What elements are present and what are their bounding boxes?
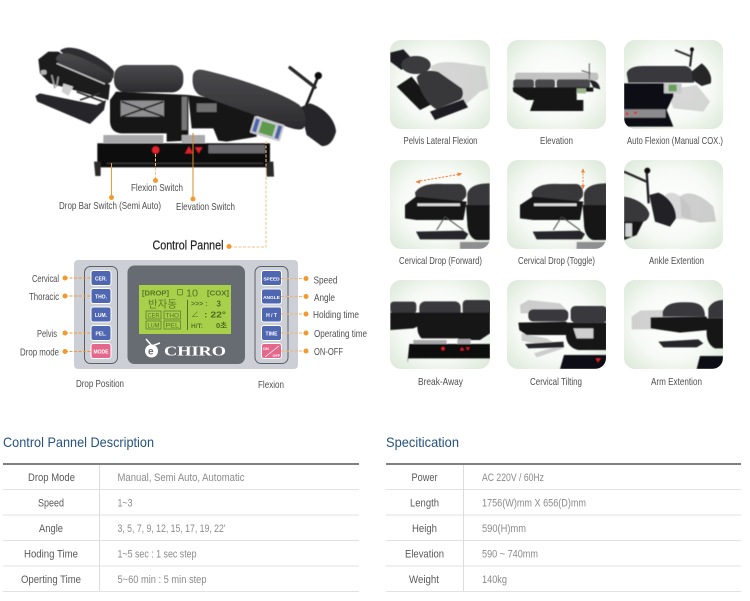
LCD screen: 0초 xyxy=(216,321,227,330)
LCD screen: 10 xyxy=(186,288,198,300)
row: angle: 3, 5, 7, 9, 12, 15, 17, 19, 22' xyxy=(118,523,226,535)
row: angle xyxy=(39,523,226,535)
row: speed: Speed xyxy=(38,498,64,510)
LCD screen: LUM xyxy=(148,322,160,330)
button: SPEED: SPEED xyxy=(263,276,280,282)
thumbnail: break-away xyxy=(390,280,491,369)
row: power: AC 220V / 60Hz xyxy=(482,472,544,484)
thumbnail: ankle extention xyxy=(624,160,723,249)
row: holding time: Hoding Time xyxy=(24,548,78,560)
label: cervical drop forward: Cervical Drop (Forward) xyxy=(399,255,482,267)
leader: elevation switch xyxy=(190,133,196,202)
thumbnail: cervical drop toggle xyxy=(507,160,607,249)
callout: speed: Speed xyxy=(314,274,338,286)
row: drop mode: Drop Mode xyxy=(28,472,75,484)
button: MODE: MODE xyxy=(94,350,109,356)
leader: drop bar switch xyxy=(109,163,114,200)
heading: specification: Specitication xyxy=(386,434,459,450)
LCD screen xyxy=(139,285,231,334)
callout: thoracic: Thoracic xyxy=(29,291,59,303)
red switches xyxy=(152,146,159,154)
drop position button group xyxy=(84,266,118,364)
label: cervical drop toggle: Cervical Drop (Toggle) xyxy=(518,255,595,267)
label: arm extention: Arm Extention xyxy=(651,376,702,388)
LCD screen: THO xyxy=(166,312,179,320)
label: flexion switch: Flexion Switch xyxy=(131,182,183,194)
callout: on-off: ON-OFF xyxy=(314,346,343,358)
button: CER: CER. xyxy=(95,276,108,282)
arrow: forward motion xyxy=(415,172,462,184)
cervical pads xyxy=(60,48,114,78)
label: cervical tilting: Cervical Tilting xyxy=(530,376,582,388)
cervical section frame xyxy=(38,52,110,100)
callout: holding time: Holding time xyxy=(313,309,359,321)
arm rest xyxy=(35,93,106,124)
panel: control panel xyxy=(74,260,298,369)
row: length: 1756(W)mm X 656(D)mm xyxy=(482,498,586,510)
button: PEL: PEL. xyxy=(95,332,107,338)
ankle handle xyxy=(306,78,317,106)
callout: pelvis: Pelvis xyxy=(37,328,57,340)
button: ANGLE: ANGLE xyxy=(263,295,281,301)
callout: operating time: Operating time xyxy=(314,328,367,340)
row: weight: Weight xyxy=(409,574,439,586)
table: specification xyxy=(386,463,741,592)
callout: drop mode: Drop mode xyxy=(20,346,59,358)
LCD screen: : 22° xyxy=(204,310,226,320)
LCD screen: 3 xyxy=(216,300,222,308)
pelvic pad xyxy=(193,70,306,130)
label: ankle extention: Ankle Extention xyxy=(649,255,704,267)
arrow: toggle motion xyxy=(581,168,585,189)
label: flexion: Flexion xyxy=(258,379,284,391)
center base xyxy=(110,92,188,142)
row: drop mode: Manual, Semi Auto, Automatic xyxy=(118,472,245,484)
logo: eChiro xyxy=(145,339,226,360)
button: ON/OFF xyxy=(262,344,282,358)
row: elevation xyxy=(405,548,538,560)
button: H/T: H / T xyxy=(266,313,277,319)
thumbnail: cervical tilting xyxy=(507,280,607,369)
thumbnail: arm extention xyxy=(624,280,723,369)
row: height: Heigh xyxy=(412,523,437,535)
button: LUM: LUM. xyxy=(95,313,108,319)
LCD screen: [DROP] xyxy=(142,290,169,298)
LCD screen: ∠ xyxy=(191,310,199,319)
small control panel xyxy=(250,116,285,142)
row: weight xyxy=(409,574,507,586)
table: control pannel description xyxy=(3,463,359,592)
row: operating time: 5~60 min : 5 min step xyxy=(118,574,206,586)
row: operating time xyxy=(21,574,206,586)
thumbnail: auto flexion xyxy=(624,40,723,129)
row: height: 590(H)mm xyxy=(482,523,526,535)
thumbnail: pelvis lateral flexion xyxy=(390,40,490,129)
callout: cervical: Cervical xyxy=(32,273,59,285)
row: holding time: 1~5 sec : 1 sec step xyxy=(118,548,196,560)
display housing xyxy=(128,266,245,364)
row: holding time xyxy=(24,548,196,560)
row: speed xyxy=(38,498,132,510)
base xyxy=(103,135,163,143)
center pad xyxy=(114,65,183,92)
row: elevation: Elevation xyxy=(405,548,444,560)
row: operating time: Operting Time xyxy=(21,574,81,586)
LCD screen: >>> : xyxy=(191,301,208,308)
LCD screen: [COX] xyxy=(207,290,229,298)
logo: eChiro: CHIRO xyxy=(164,344,226,360)
heading: control pannel: Control Pannel xyxy=(152,238,224,252)
leader: flexion switch xyxy=(153,154,158,183)
label: drop position: Drop Position xyxy=(76,378,124,390)
row: power xyxy=(412,472,544,484)
button: ON/OFF: OFF xyxy=(272,354,281,358)
LCD screen: H/T: xyxy=(191,323,203,330)
row: weight: 140kg xyxy=(482,574,507,586)
button: THO: THO. xyxy=(95,294,108,300)
heading: control pannel description: Control Pannel Description xyxy=(3,434,154,450)
callout: angle: Angle xyxy=(314,292,335,304)
button: ON/OFF: ON xyxy=(263,347,269,351)
foot pad xyxy=(300,103,336,146)
LCD screen: PEL xyxy=(166,322,179,330)
callouts: left of panel xyxy=(20,273,91,358)
illustration: adjusting table xyxy=(35,48,336,177)
label: drop bar switch: Drop Bar Switch (Semi Auto) xyxy=(59,200,161,212)
label: elevation switch: Elevation Switch xyxy=(176,201,235,213)
logo: eChiro: e xyxy=(148,346,154,358)
label: elevation: Elevation xyxy=(540,135,573,147)
callouts: right of panel xyxy=(281,274,367,358)
thumbnail: elevation xyxy=(507,40,606,129)
pelvic under frame xyxy=(188,95,257,142)
row: angle: Angle xyxy=(39,523,63,535)
row: drop mode xyxy=(28,472,245,484)
label: pelvis lateral flexion: Pelvis Lateral Flexion xyxy=(404,135,478,147)
row: elevation: 590 ~ 740mm xyxy=(482,548,538,560)
row: power: Power xyxy=(412,472,438,484)
button: TIME: TIME xyxy=(266,332,278,338)
row: length xyxy=(410,498,586,510)
flexion button group xyxy=(255,266,288,364)
thumbnail: cervical drop forward xyxy=(390,160,490,249)
LCD screen: CER xyxy=(148,312,160,320)
leader: control pannel xyxy=(226,141,266,249)
label: break-away: Break-Away xyxy=(418,376,464,388)
LCD screen: 반자동 xyxy=(148,298,177,310)
row: speed: 1~3 xyxy=(118,498,132,510)
row: height xyxy=(412,523,526,535)
row: length: Length xyxy=(410,498,439,510)
